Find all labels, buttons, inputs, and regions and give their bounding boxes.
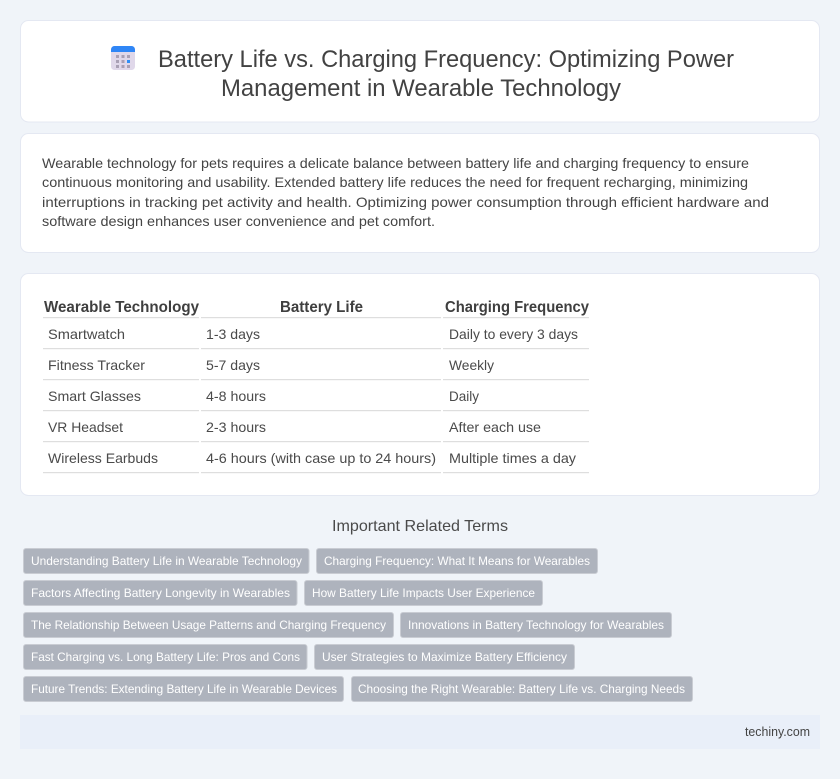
row: fitness tracker: 5-7 days — [206, 357, 260, 373]
row: vr headset: After each use — [449, 419, 541, 435]
text block: introduction paragraph: continuous monitoring and usability. Extended battery life reduces the need for frequent recharging, minimizing — [42, 174, 748, 190]
text block: introduction paragraph: software design enhances user convenience and pet comfort. — [42, 213, 435, 229]
icon: calendar — [111, 46, 135, 70]
row: wireless earbuds: Wireless Earbuds — [48, 450, 158, 466]
row: vr headset: VR Headset — [48, 419, 123, 435]
title: Battery Life vs. Charging Frequency: Optimizing Power — [158, 46, 734, 73]
title: Management in Wearable Technology — [221, 75, 621, 102]
table header — [44, 299, 589, 316]
footer — [20, 715, 820, 749]
row: vr headset: 2-3 hours — [206, 419, 266, 435]
row: smartwatch: 1-3 days — [206, 326, 260, 342]
tags: related terms: Choosing the Right Wearable: Battery Life vs. Charging Needs — [358, 682, 685, 696]
tags: related terms: Factors Affecting Battery Longevity in Wearables — [31, 586, 290, 600]
text block: introduction paragraph: interruptions in tracking pet activity and health. Optimizing power consumption through efficient hardware and — [42, 194, 769, 210]
row: wireless earbuds — [48, 450, 576, 466]
row: fitness tracker — [48, 357, 494, 373]
tags: related terms: Fast Charging vs. Long Battery Life: Pros and Cons — [31, 650, 300, 664]
row: smart glasses: 4-8 hours — [206, 388, 266, 404]
footer: techiny.com — [745, 724, 810, 739]
panel: title header — [20, 20, 820, 122]
row: smartwatch: Daily to every 3 days — [449, 326, 578, 342]
title — [158, 46, 734, 102]
row: vr headset — [48, 419, 541, 435]
text block: introduction paragraph: Wearable technology for pets requires a delicate balance between battery life and charging frequency to ensure — [42, 155, 749, 171]
row: smart glasses — [48, 388, 479, 404]
tags: related terms: The Relationship Between Usage Patterns and Charging Frequency — [31, 618, 386, 632]
table header: Charging Frequency — [445, 299, 589, 316]
row: fitness tracker: Weekly — [449, 357, 494, 373]
text block: introduction paragraph — [42, 155, 769, 229]
row: smartwatch — [48, 326, 578, 342]
tags: related terms: User Strategies to Maximize Battery Efficiency — [322, 650, 567, 664]
row: wireless earbuds: Multiple times a day — [449, 450, 576, 466]
tags: related terms: Future Trends: Extending Battery Life in Wearable Devices — [31, 682, 337, 696]
tags: related terms: How Battery Life Impacts User Experience — [312, 586, 535, 600]
tags: related terms — [24, 548, 692, 702]
table header: Wearable Technology — [44, 299, 199, 316]
row: wireless earbuds: 4-6 hours (with case up to 24 hours) — [206, 450, 436, 466]
tags: related terms: Innovations in Battery Technology for Wearables — [408, 618, 664, 632]
row: smart glasses: Smart Glasses — [48, 388, 141, 404]
panel: comparison table — [20, 274, 820, 496]
table header: Battery Life — [280, 299, 363, 316]
heading: important related terms: Important Related Terms — [332, 518, 508, 535]
tags: related terms: Understanding Battery Life in Wearable Technology — [31, 554, 302, 568]
row: smart glasses: Daily — [449, 388, 479, 404]
row: smartwatch: Smartwatch — [48, 326, 125, 342]
row: fitness tracker: Fitness Tracker — [48, 357, 145, 373]
tags: related terms: Charging Frequency: What It Means for Wearables — [324, 554, 590, 568]
panel: introduction — [20, 134, 820, 252]
